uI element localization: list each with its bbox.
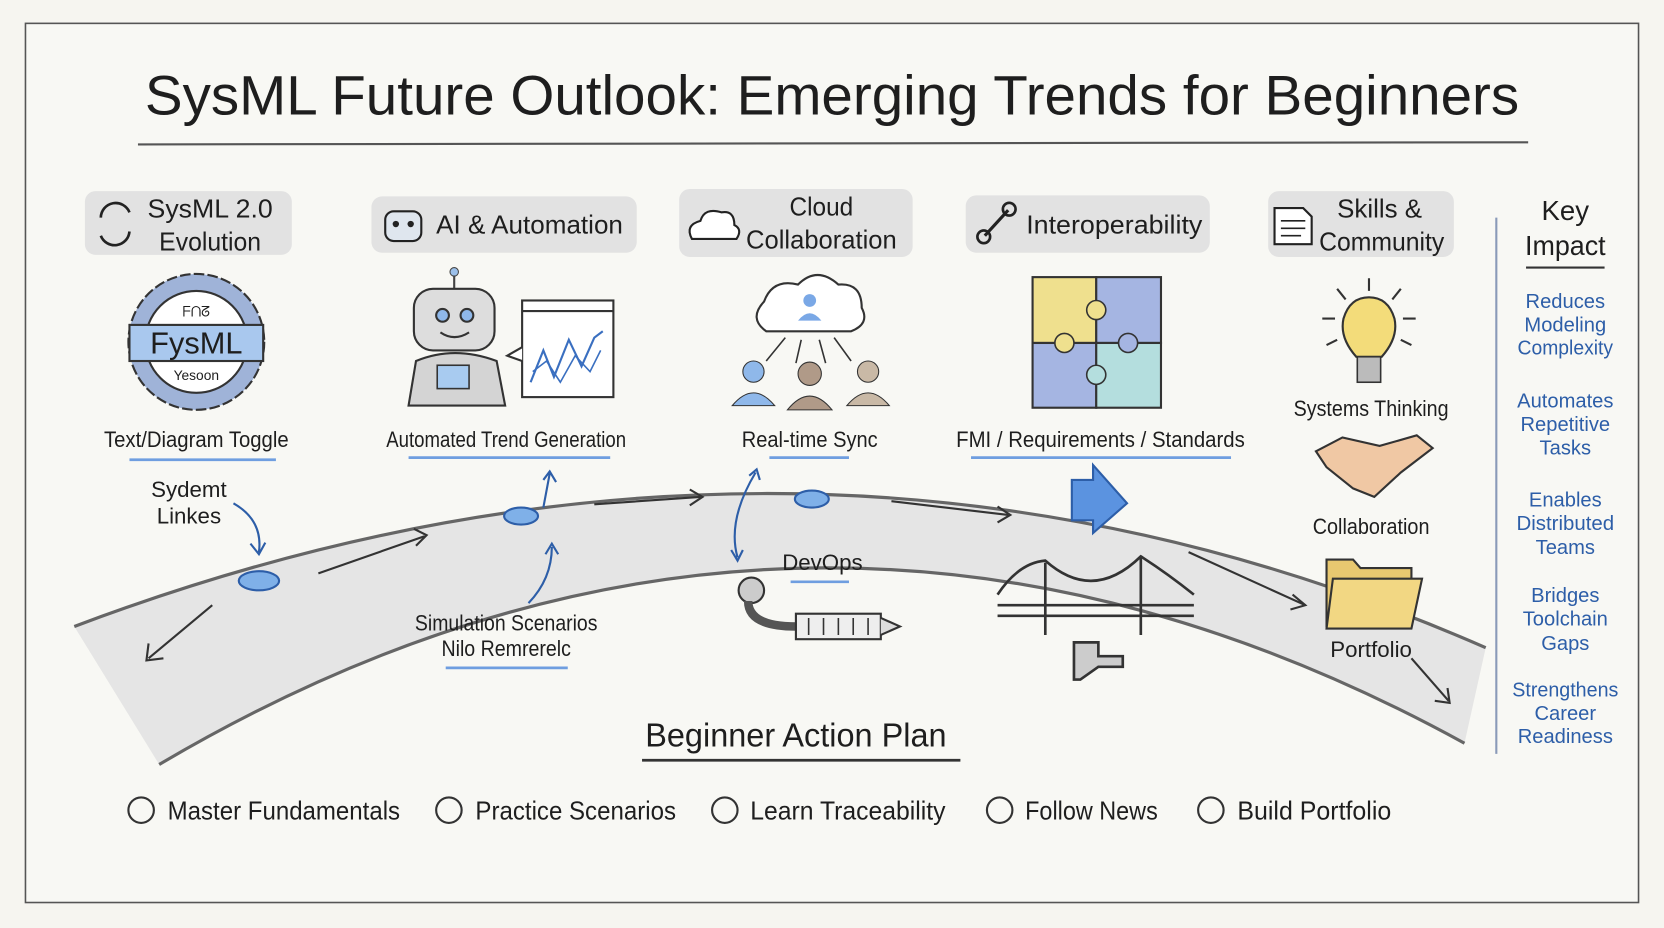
icon: light bulb bbox=[1322, 278, 1416, 382]
label: Collaboration: Collaboration bbox=[1313, 514, 1429, 539]
arrow: cloud to devops bbox=[731, 469, 760, 561]
icon: SysML badge: FysML bbox=[150, 326, 242, 361]
header: SysML 2.0 Evolution: SysML 2.0 bbox=[148, 196, 273, 224]
icon: SysML badge: Yesoon bbox=[174, 368, 219, 383]
panel: Key Impact bbox=[1496, 195, 1618, 754]
panel: Key Impact: Toolchain bbox=[1523, 608, 1608, 630]
panel: Key Impact: Reduces bbox=[1526, 291, 1605, 313]
icon: folder bbox=[1327, 560, 1422, 629]
label: Portfolio: Portfolio bbox=[1330, 637, 1412, 662]
panel: Key Impact: Career bbox=[1535, 703, 1596, 725]
icon: handshake bbox=[1316, 435, 1433, 497]
label: Text/Diagram Toggle: Text/Diagram Toggle bbox=[104, 427, 289, 452]
panel: Key Impact: Readiness bbox=[1518, 726, 1613, 748]
panel: Key Impact: Modeling bbox=[1524, 314, 1606, 336]
header: Skills & Community: Skills & bbox=[1337, 196, 1422, 224]
label: Syndemt Linkes bbox=[151, 477, 265, 554]
label: Systems Thinking: Systems Thinking bbox=[1294, 396, 1449, 421]
label: Simulation text bbox=[415, 611, 597, 668]
header: SysML 2.0 Evolution: Evolution bbox=[159, 229, 261, 257]
panel: Key Impact: Distributed bbox=[1516, 513, 1614, 535]
checklist: Practice Scenarios bbox=[475, 798, 676, 826]
checklist: Build Portfolio bbox=[1237, 798, 1391, 826]
panel: Key Impact: Teams bbox=[1536, 537, 1595, 559]
checklist: Master Fundamentals bbox=[168, 798, 400, 826]
label: Syndemt Linkes: Linkes bbox=[157, 503, 221, 528]
label: Automated Trend Generation: Automated Trend Generation bbox=[386, 427, 626, 452]
icon: SysML badge bbox=[128, 274, 264, 410]
panel: Key Impact: Impact bbox=[1525, 230, 1606, 261]
panel: Key Impact: Enables bbox=[1529, 489, 1602, 511]
panel: Key Impact: Gaps bbox=[1541, 633, 1589, 655]
icon: robot bbox=[409, 268, 505, 406]
label: FMI / Requirements / Standards: FMI / Requirements / Standards bbox=[956, 427, 1245, 452]
header: Interoperability bbox=[966, 195, 1210, 253]
header: AI & Automation: AI & Automation bbox=[436, 212, 623, 240]
title: SysML Future Outlook: Emerging Trends for Beginners bbox=[145, 65, 1519, 127]
icon: DevOps pipeline bbox=[739, 550, 900, 639]
panel: Key Impact: Bridges bbox=[1531, 585, 1599, 607]
checklist: Follow News bbox=[1025, 798, 1158, 826]
header: Cloud Collaboration: Collaboration bbox=[746, 226, 897, 254]
road bbox=[74, 489, 1486, 764]
heading: Beginner Action Plan: Beginner Action Plan bbox=[645, 716, 947, 753]
icon: cloud with people bbox=[732, 275, 889, 410]
milestone dots bbox=[239, 491, 829, 590]
header: Interoperability: Interoperability bbox=[1026, 212, 1203, 240]
icon: blue arrow bbox=[1072, 465, 1127, 533]
icon: puzzle bbox=[1033, 277, 1161, 408]
header: Skills & Community bbox=[1268, 191, 1454, 257]
panel: Key Impact: Tasks bbox=[1540, 437, 1591, 459]
panel: Key Impact: Repetitive bbox=[1520, 414, 1610, 436]
checklist bbox=[128, 797, 1391, 826]
icon: bridge bbox=[998, 556, 1194, 680]
icon: SysML badge: ᖴᑎᘔ bbox=[183, 304, 210, 319]
icon: DevOps pipeline: DevOps bbox=[782, 550, 863, 575]
header: Skills & Community: Community bbox=[1319, 229, 1445, 257]
header: SysML 2.0 Evolution bbox=[85, 191, 292, 257]
arrows: AI upward bbox=[528, 471, 558, 603]
header: AI & Automation bbox=[371, 196, 637, 253]
checklist: Learn Traceability bbox=[750, 798, 946, 826]
label: Simulation text: Simulation Scenarios bbox=[415, 611, 597, 636]
panel: Key Impact: Automates bbox=[1517, 391, 1613, 413]
panel: Key Impact: Complexity bbox=[1518, 338, 1614, 360]
label: Syndemt Linkes: Sydemt bbox=[151, 477, 227, 502]
icon: chart window bbox=[507, 300, 613, 397]
label: Simulation text: Nilo Remrerelc bbox=[441, 636, 571, 661]
panel: Key Impact: Key bbox=[1542, 195, 1589, 226]
header: Cloud Collaboration: Cloud bbox=[790, 194, 853, 222]
header: Cloud Collaboration bbox=[679, 189, 913, 257]
panel: Key Impact: Strengthens bbox=[1512, 680, 1618, 702]
label: Real-time Sync: Real-time Sync bbox=[742, 427, 878, 452]
